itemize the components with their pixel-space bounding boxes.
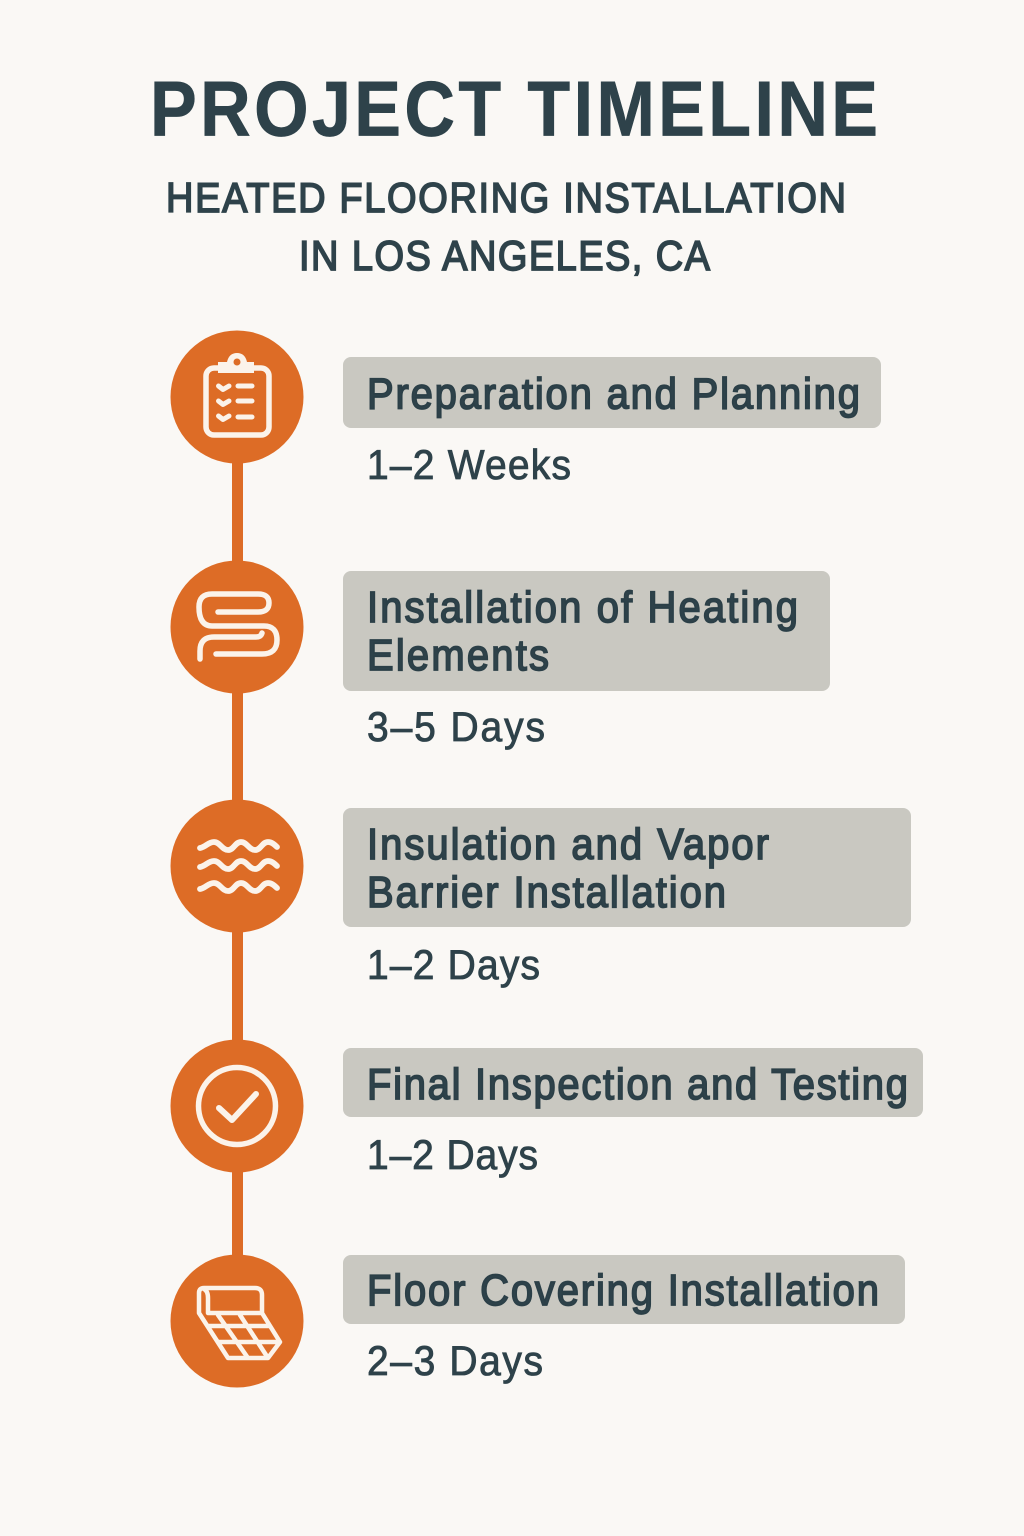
icon: floor roll and tiles [170, 1254, 304, 1388]
step name: Preparation and Planning [367, 369, 860, 418]
step name: Final Inspection and Testing [367, 1059, 908, 1108]
step 3: insulation and vapor barrier installation [170, 800, 911, 988]
label box: installation of heating elements [343, 571, 830, 691]
icon: vapor waves [170, 800, 304, 932]
step name [367, 582, 798, 679]
duration: 3–5 Days [367, 703, 545, 750]
step 4: final inspection and testing [170, 1040, 923, 1178]
timeline connector line [232, 396, 243, 1321]
step 2: installation of heating elements [170, 560, 830, 750]
step 1: preparation and planning [170, 330, 881, 488]
icon: heating coil [170, 560, 304, 694]
label box: insulation and vapor barrier [343, 808, 911, 927]
step name: Installation of Heating [367, 582, 798, 631]
step name: Elements [367, 630, 549, 679]
step name: Insulation and Vapor [367, 819, 769, 868]
step name: Floor Covering Installation [367, 1265, 879, 1314]
icon: clipboard checklist [170, 330, 304, 464]
duration: 1–2 Weeks [367, 441, 571, 488]
label box: floor covering installation [343, 1255, 905, 1324]
subtitle [166, 175, 846, 279]
duration: 2–3 Days [367, 1337, 543, 1384]
label box: preparation and planning [343, 357, 881, 428]
title: PROJECT TIMELINE [150, 65, 878, 152]
label box: final inspection and testing [343, 1048, 923, 1117]
duration: 1–2 Days [367, 941, 540, 988]
step name [367, 819, 769, 916]
step 5: floor covering installation [170, 1254, 905, 1388]
duration: 1–2 Days [367, 1131, 538, 1178]
icon: check circle [170, 1040, 304, 1172]
subtitle: HEATED FLOORING INSTALLATION [166, 175, 846, 221]
subtitle: IN LOS ANGELES, CA [299, 233, 710, 279]
step name: Barrier Installation [367, 867, 726, 916]
